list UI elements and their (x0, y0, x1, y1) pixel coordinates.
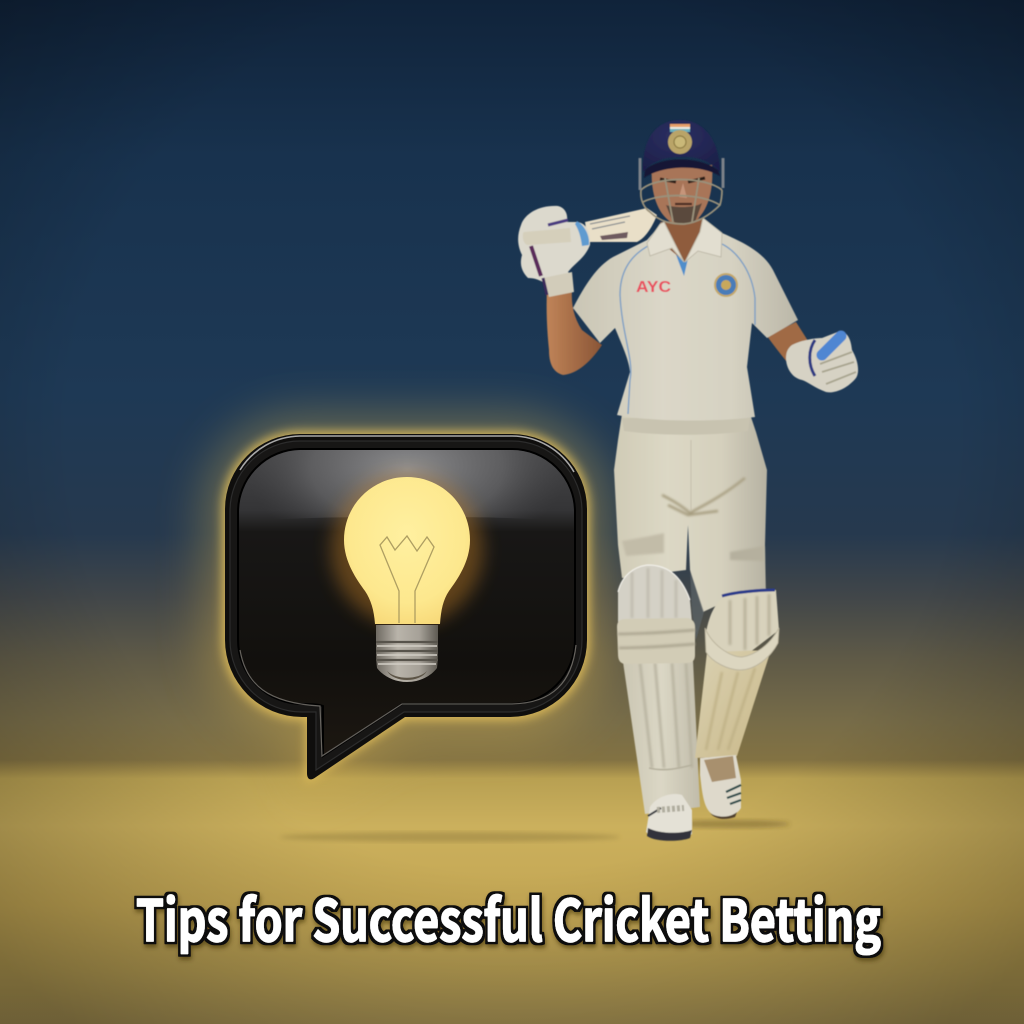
shoe left (646, 794, 692, 841)
upper glove (518, 206, 590, 297)
shoe right (700, 755, 741, 819)
bubble sheen (240, 450, 574, 522)
chest badge (714, 273, 738, 297)
face (652, 165, 712, 225)
neck (660, 218, 708, 262)
bulb halo (331, 474, 483, 626)
floor (0, 760, 1024, 1024)
bubble rim band (230, 441, 582, 770)
speech bubble with light bulb icon (205, 415, 607, 800)
helmet grille (640, 158, 723, 224)
floor shadow (280, 832, 620, 842)
shirt trim piping (620, 244, 755, 414)
bat (585, 208, 657, 242)
leg pad left (617, 565, 700, 814)
sponsor logo: AYC (636, 279, 671, 296)
bubble body (225, 434, 587, 779)
cricket player (518, 120, 858, 841)
bulb screw base (376, 625, 438, 682)
leg pad right (695, 590, 779, 758)
bubble rim highlight (240, 436, 574, 472)
player floor shadow (670, 820, 790, 828)
bubble glow (222, 431, 590, 783)
bubble face (238, 449, 575, 756)
left arm raised (547, 290, 602, 375)
bulb glass (344, 477, 470, 624)
placket (675, 250, 690, 276)
helmet dome (643, 120, 720, 172)
right forearm (767, 322, 810, 366)
bulb filament (380, 536, 434, 623)
bubble inner highlight line (240, 645, 576, 756)
lower glove (786, 331, 858, 392)
helmet crest (668, 130, 692, 154)
bubble ambient glow (205, 415, 607, 800)
head and helmet (640, 120, 723, 225)
helmet flag (670, 124, 690, 132)
trousers (614, 414, 767, 640)
collar (647, 218, 722, 262)
background wall (0, 0, 1024, 785)
shirt (573, 218, 798, 421)
